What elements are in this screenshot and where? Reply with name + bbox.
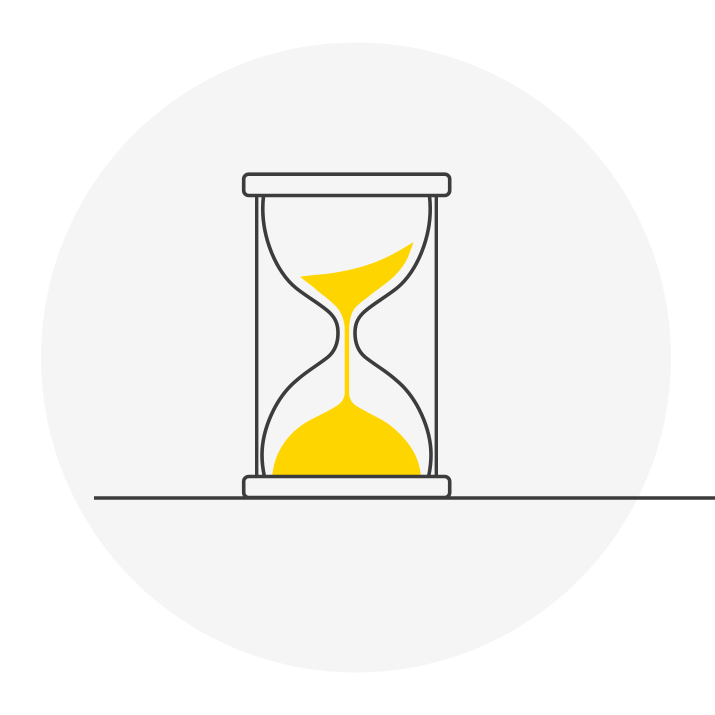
icon: hourglass (244, 174, 450, 497)
sand: falling stream (345, 328, 349, 398)
top cap (244, 174, 450, 196)
glass outline: left (262, 196, 338, 477)
background circle (41, 42, 671, 672)
ground line (94, 496, 715, 500)
sand: lower pile (272, 394, 421, 476)
sand: upper bulb (300, 242, 414, 332)
hourglass frame posts (257, 195, 436, 477)
glass outline: right (355, 196, 431, 477)
bottom cap (244, 476, 450, 498)
